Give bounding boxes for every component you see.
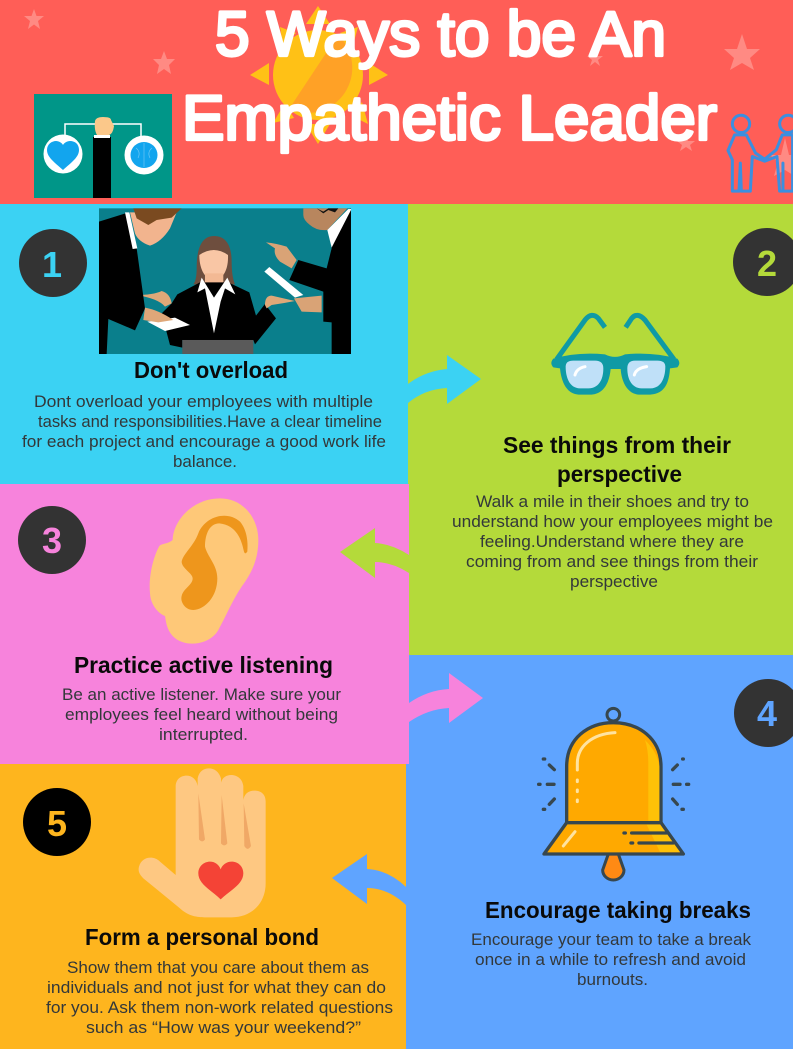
badge: number 3: 3 (42, 520, 62, 561)
badge: number 3 (18, 506, 86, 574)
text block: step 2 (452, 493, 773, 591)
badge: number 5: 5 (47, 803, 67, 844)
left man (99, 213, 145, 354)
title (182, 0, 717, 154)
badge: number 1 (19, 229, 87, 297)
text block: step 2: coming from and see things from their (466, 553, 759, 571)
text block: step 3: interrupted. (159, 726, 248, 744)
heading: step 3: Practice active listening (74, 652, 333, 678)
panel: step 1 background (0, 204, 408, 484)
icon: two people shaking hands (728, 115, 793, 191)
title: Empathetic Leader (182, 84, 717, 154)
badge: number 4: 4 (757, 693, 777, 734)
panel: step 5 background (0, 764, 406, 1049)
badge: number 1: 1 (42, 244, 62, 285)
text block: step 4: Encourage your team to take a break (471, 931, 752, 949)
title: 5 Ways to be An (215, 0, 666, 70)
woman (193, 236, 235, 284)
arrow: step 3 to step 4 (409, 673, 483, 723)
text block: step 5: individuals and not just for what they can do (47, 979, 386, 997)
heading: step 5: Form a personal bond (85, 924, 319, 950)
panel: step 3 background (0, 484, 409, 764)
badge: number 2: 2 (757, 243, 777, 284)
arrow: step 4 to step 5 (332, 854, 406, 905)
text block: step 3: Be an active listener. Make sure your (62, 686, 342, 704)
badge: number 4 (734, 679, 793, 747)
heading: step 2: See things from their (503, 432, 731, 458)
right man (303, 208, 347, 230)
arrow: step 1 to step 2 (408, 355, 481, 404)
panel: step 4 background (406, 655, 793, 1049)
text block: step 5: such as “How was your weekend?” (86, 1019, 361, 1037)
text block: step 1: balance. (173, 453, 237, 471)
icon: sun (250, 6, 388, 144)
badge: number 5 (23, 788, 91, 856)
arrow: step 2 to step 3 (340, 528, 409, 578)
text block: step 1: for each project and encourage a good work life (22, 433, 386, 451)
icon: glasses (551, 315, 679, 395)
text block: step 2: perspective (570, 573, 658, 591)
text block: step 5: for you. Ask them non-work related questions (46, 999, 393, 1017)
heading: step 2 (503, 432, 731, 487)
heading: step 1: Don't overload (134, 357, 288, 383)
text block: step 2: Walk a mile in their shoes and try to (476, 493, 749, 511)
panel: header (0, 0, 793, 204)
text block: step 2: feeling.Understand where they are (480, 533, 744, 551)
text block: step 2: understand how your employees might be (452, 513, 773, 531)
text block: step 4 (471, 931, 752, 989)
heading: step 2: perspective (557, 461, 682, 487)
text block: step 3: employees feel heard without being (65, 706, 338, 724)
icon: ear (150, 498, 258, 644)
text block: step 4: once in a while to refresh and avoid (475, 951, 746, 969)
icon: bell (539, 708, 689, 880)
badge: number 2 (733, 228, 793, 296)
icon: hand with heart (139, 768, 266, 917)
text block: step 5 (46, 959, 393, 1037)
text block: step 4: burnouts. (577, 971, 648, 989)
text block: step 1: tasks and responsibilities.Have a clear timeline (38, 413, 382, 431)
panel: step 2 background (408, 204, 793, 655)
illustration: overloaded employee (99, 208, 351, 354)
text block: step 3 (62, 686, 342, 744)
heading: step 4: Encourage taking breaks (485, 897, 751, 923)
icon: leader balancing heart and brain (34, 94, 172, 198)
text block: step 1 (22, 393, 386, 471)
text block: step 5: Show them that you care about them as (67, 959, 369, 977)
text block: step 1: Dont overload your employees with multiple (34, 393, 373, 411)
